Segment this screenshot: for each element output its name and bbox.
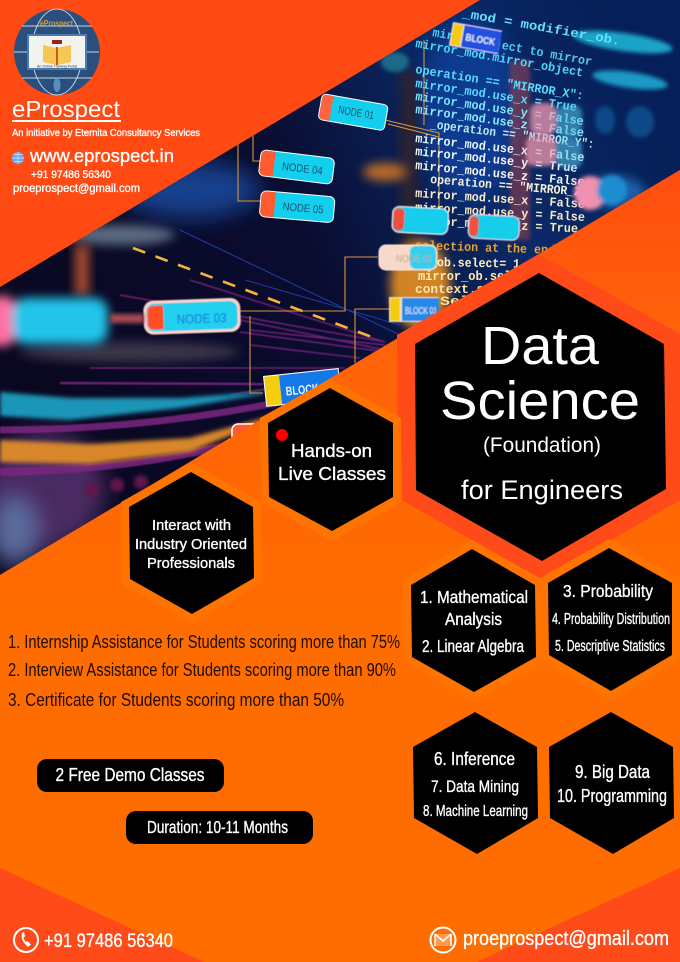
orange streak bbox=[0, 415, 275, 464]
hexagon: interact with professionals: Industry Oriented bbox=[135, 537, 247, 553]
hexagon: interact with professionals: Interact with bbox=[152, 518, 231, 534]
code lines: mirror_mod.use_y = True bbox=[415, 145, 578, 176]
blurred light patches bbox=[0, 20, 674, 565]
code lines: mirror_object to mirror bbox=[431, 26, 593, 69]
code lines: operation == "MIRROR_X": bbox=[414, 63, 584, 104]
title: Data: Data bbox=[481, 316, 600, 376]
code lines: mirror_mod.use_y = False bbox=[414, 90, 585, 129]
live dot bbox=[276, 429, 288, 441]
subtitle: for Engineers: for Engineers bbox=[461, 475, 623, 505]
hexagon: topics 6-8: 8. Machine Learning bbox=[423, 803, 528, 820]
code lines: selection at the end bbox=[415, 239, 555, 258]
benefits list: 3. Certificate for Students scoring more than 50% bbox=[8, 690, 344, 710]
blurred large node bbox=[0, 296, 108, 346]
pill: duration: Duration: 10-11 Months bbox=[147, 817, 288, 837]
hexagon: topics 6-8 bbox=[413, 712, 538, 854]
node 03: NODE 03 bbox=[176, 310, 227, 327]
connector between blurred node and node 03 bbox=[110, 314, 144, 323]
hexagon: topics 9-10 bbox=[549, 712, 674, 854]
hexagon: hands-on live classes: Hands-on bbox=[291, 441, 372, 461]
pill: free demo classes bbox=[37, 759, 224, 792]
code lines: context.scene bbox=[415, 283, 515, 297]
yellow dashed line bbox=[133, 248, 380, 340]
orange connector lines bbox=[238, 40, 439, 393]
block top bbox=[449, 22, 502, 54]
hexagon: topics 9-10: 9. Big Data bbox=[575, 762, 651, 782]
node 04 bbox=[258, 149, 335, 185]
hexagon: interact with professionals: Professionals bbox=[147, 556, 235, 572]
subtitle: Foundation: (Foundation) bbox=[483, 434, 601, 457]
hexagon: hands-on live classes: Live Classes bbox=[278, 464, 386, 484]
block top: BLOCK bbox=[464, 32, 497, 49]
pill: duration bbox=[126, 811, 313, 844]
node 03 bbox=[143, 298, 241, 335]
node 05: NODE 05 bbox=[282, 201, 324, 216]
cyan streak bbox=[0, 392, 263, 420]
code lines: mirror_mod.use_y = False bbox=[415, 201, 585, 225]
code lines: mirror_mod.use_x = False bbox=[415, 132, 585, 165]
blurred node pair bbox=[379, 206, 520, 270]
hexagon: topics 1-2: 2. Linear Algebra bbox=[422, 636, 524, 656]
hexagon: topics 6-8: 6. Inference bbox=[434, 749, 515, 769]
code lines: mirror_mod.use_x = True bbox=[414, 77, 578, 115]
blurred node pair: NODE 02 bbox=[396, 254, 432, 265]
code lines: _operation == "MIRROR_Y": bbox=[429, 118, 595, 152]
main title hexagon bbox=[397, 254, 680, 580]
phone small: +91 97486 56340 bbox=[31, 169, 111, 181]
website: www.eprospect.in bbox=[29, 146, 174, 166]
block small: BLOCK 01 bbox=[405, 306, 437, 317]
logo: An Online Training Portal bbox=[37, 64, 77, 68]
block 01 large: BLOCK 01 bbox=[285, 380, 332, 399]
block 01 large bbox=[263, 368, 342, 407]
benefits list bbox=[8, 632, 400, 710]
hexagon: topics 1-2 bbox=[403, 540, 544, 701]
code lines: mirror_mod.use_z = False bbox=[414, 103, 585, 141]
logo: eProspect bbox=[40, 19, 73, 28]
partly hidden node bbox=[231, 423, 255, 438]
node 01: NODE 01 bbox=[337, 104, 375, 122]
code lines: operation == "MIRROR_Z": bbox=[430, 173, 595, 201]
code lines: mirror_mod.mirror_object bbox=[414, 37, 584, 80]
hexagon: topics 6-8: 7. Data Mining bbox=[431, 777, 519, 796]
photo band: code and node diagram bbox=[0, 0, 680, 580]
code lines bbox=[414, 7, 621, 309]
code lines: _ob.select= 1 bbox=[429, 256, 521, 272]
block small bbox=[389, 297, 439, 322]
hexagon: interact with professionals bbox=[121, 463, 262, 623]
background: red-orange top field bbox=[0, 0, 490, 290]
logo bbox=[14, 9, 100, 95]
hexagon: topics 3-5: 3. Probability bbox=[563, 581, 653, 601]
initiative line: An initiative by Eternita Consultancy Services bbox=[12, 128, 200, 139]
node 04: NODE 04 bbox=[281, 161, 323, 178]
bottom right corner bbox=[477, 868, 680, 962]
code lines: mirror_mod.use_x = False bbox=[415, 187, 585, 212]
footer phone: +91 97486 56340 bbox=[44, 931, 173, 952]
code lines: mirror_mod.use_z = True bbox=[415, 214, 578, 237]
footer phone bbox=[14, 928, 173, 952]
globe icon bbox=[12, 152, 24, 164]
title: Science: Science bbox=[440, 371, 640, 431]
photo base bbox=[0, 0, 680, 580]
purple converging lines bbox=[0, 280, 385, 472]
thin blue lines bbox=[180, 230, 400, 335]
brand name: eProspect bbox=[12, 96, 120, 122]
code lines: Sel bbox=[440, 295, 471, 309]
pill: free demo classes: 2 Free Demo Classes bbox=[56, 765, 204, 785]
bottom left corner bbox=[0, 868, 204, 962]
code lines: mirror_mod.use_z = False bbox=[415, 159, 585, 190]
blurred dots bbox=[85, 475, 148, 497]
hexagon: topics 1-2: 1. Mathematical bbox=[420, 587, 528, 607]
hexagon: topics 1-2: Analysis bbox=[445, 609, 502, 629]
benefits list: 1. Internship Assistance for Students scoring more than 75% bbox=[8, 632, 400, 652]
hexagon: topics 3-5 bbox=[540, 539, 680, 700]
code lines: mirror_ob.select bbox=[418, 270, 533, 284]
benefits list: 2. Interview Assistance for Students scoring more than 90% bbox=[8, 660, 396, 680]
node 05 bbox=[259, 190, 336, 223]
node 01 bbox=[317, 93, 389, 131]
hexagon: hands-on live classes bbox=[260, 379, 402, 541]
email small: proeprospect@gmail.com bbox=[13, 181, 140, 195]
code lines: _mod = modifier_ob. bbox=[460, 7, 621, 49]
pink blurred blobs bbox=[526, 103, 627, 210]
